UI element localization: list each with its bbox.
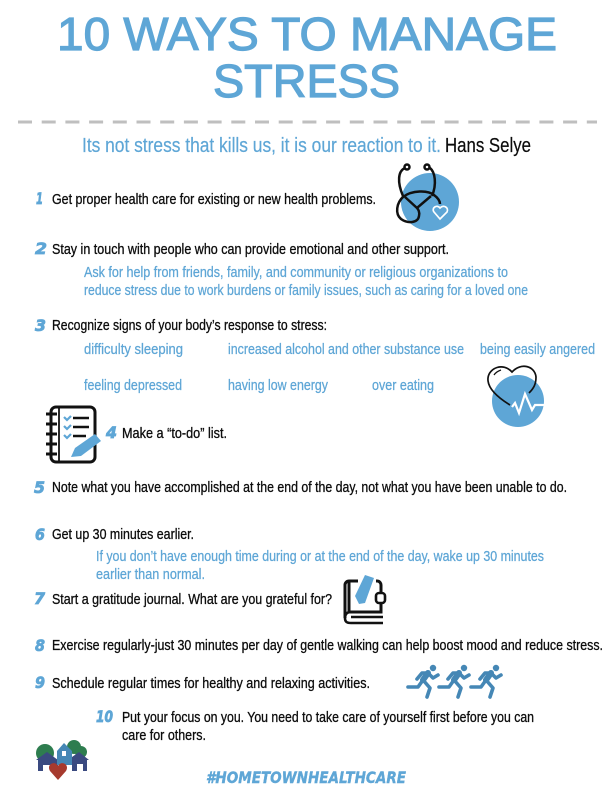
item 1: Get proper health care for existing or new health problems. [52,192,376,208]
icon: heart with pulse [488,366,544,427]
item 4 [105,423,227,442]
stress signs: increased alcohol and other substance use [228,342,464,358]
item 10: 10 [96,707,113,726]
title: 10 WAYS TO MANAGE [57,8,557,60]
item 6 [35,525,194,544]
item 2 detail: Ask for help from friends, family, and community or religious organizations to [84,265,508,281]
item 6: Get up 30 minutes earlier. [52,527,194,543]
icon: journal with pencil [345,575,385,623]
quote: Its not stress that kills us, it is our reaction to it. [82,135,441,157]
item 3: Recognize signs of your body’s response to stress: [52,318,327,334]
hashtag: #HOMETOWNHEALTHCARE [206,768,406,787]
stress signs: feeling depressed [84,378,182,394]
item 3 [35,316,327,335]
icon: stethoscope with heart [397,164,459,231]
item 6 detail [96,549,544,583]
item 3: 3 [35,316,46,335]
item 4: 4 [105,423,117,442]
stress signs: being easily angered [480,342,595,358]
icon: houses and heart logo [36,740,89,780]
stress signs: having low energy [228,378,329,394]
item 2: 2 [35,239,47,258]
stress signs: over eating [372,378,434,394]
item 9: 9 [35,673,45,692]
item 10: Put your focus on you. You need to take care of yourself first before you can [122,710,534,726]
item 7 [34,589,332,608]
icon: three runners [408,665,501,697]
title: STRESS [213,55,400,107]
stress signs: difficulty sleeping [84,342,183,358]
item 7: Start a gratitude journal. What are you grateful for? [52,592,332,608]
item 5: 5 [34,478,45,497]
item 2 detail: reduce stress due to work burdens or family issues, such as caring for a loved one [84,283,528,299]
quote: Hans Selye [445,135,531,157]
item 2 detail [84,265,528,299]
item 7: 7 [34,589,46,608]
title [57,8,557,107]
item 1: 1 [36,189,43,208]
item 10 [96,707,534,744]
item 6 detail: earlier than normal. [96,567,205,583]
item 6 detail: If you don’t have enough time during or at the end of the day, wake up 30 minutes [96,549,544,565]
item 2: Stay in touch with people who can provide emotional and other support. [52,242,449,258]
item 6: 6 [35,525,45,544]
item 4: Make a “to-do” list. [122,426,227,442]
item 10: care for others. [122,728,206,744]
item 9: Schedule regular times for healthy and relaxing activities. [52,676,370,692]
icon: to-do notebook [46,407,101,462]
item 8: 8 [35,636,45,655]
stress signs [84,342,595,394]
